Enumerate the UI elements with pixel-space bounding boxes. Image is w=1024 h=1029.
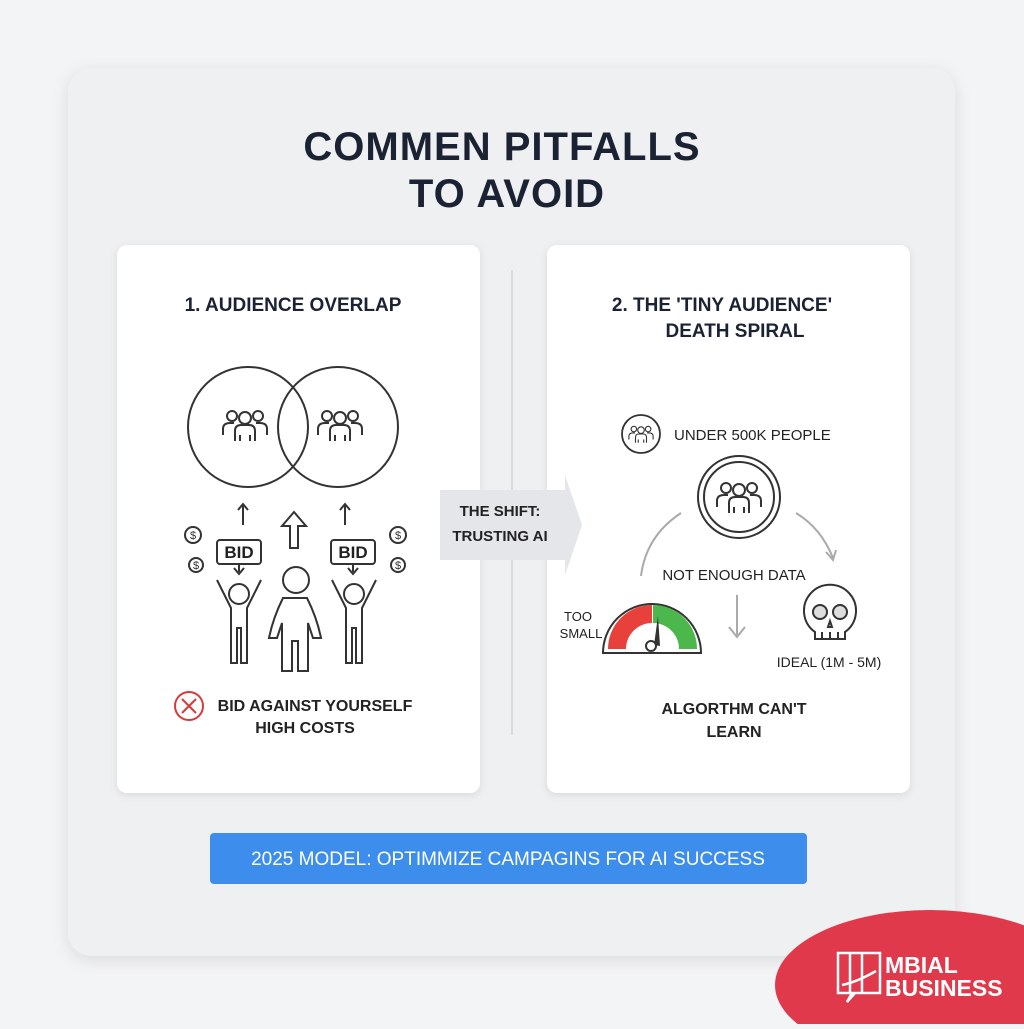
- title: [303, 125, 701, 216]
- text: algorithm can't learn: LEARN: [706, 724, 762, 741]
- venn diagram: [188, 367, 398, 487]
- text: algorithm can't learn: ALGORTHM CAN'T: [661, 701, 807, 718]
- logo: mbial business: [775, 910, 1024, 1029]
- panel: tiny audience death spiral: UNDER 500K PEOPLE: [674, 427, 831, 444]
- title: TO AVOID: [409, 172, 605, 216]
- heading: audience overlap: 1. AUDIENCE OVERLAP: [185, 295, 402, 316]
- panel: tiny audience death spiral: TOO: [564, 609, 592, 624]
- banner: 2025 model: 2025 MODEL: OPTIMMIZE CAMPAGINS FOR AI SUCCESS: [251, 849, 765, 870]
- arrow: the shift: TRUSTING AI: [452, 528, 548, 545]
- panel: audience overlap: [117, 245, 480, 793]
- icon: central group: [698, 456, 780, 538]
- arrow: the shift: [440, 475, 582, 575]
- icon: red x: [175, 692, 203, 720]
- heading: death spiral: 2. THE 'TINY AUDIENCE': [612, 295, 832, 316]
- panel: audience overlap: BID: [224, 543, 254, 562]
- panel: audience overlap: BID: [338, 543, 368, 562]
- panel: audience overlap: $: [190, 530, 196, 542]
- panel: tiny audience death spiral: SMALL: [560, 626, 602, 641]
- text: bid against yourself: HIGH COSTS: [255, 720, 355, 737]
- title: COMMEN PITFALLS: [303, 125, 701, 169]
- logo: mbial business: BUSINESS: [885, 975, 1003, 1001]
- heading: death spiral: [612, 295, 832, 342]
- text: algorithm can't learn: [661, 701, 807, 741]
- panel: audience overlap: $: [395, 560, 401, 572]
- icon: skull: [804, 585, 856, 639]
- panel: audience overlap: $: [193, 560, 199, 572]
- logo: mbial business: MBIAL: [885, 952, 958, 978]
- panel: audience overlap: $: [395, 530, 401, 542]
- spiral arrows: [641, 513, 836, 637]
- panel: tiny audience death spiral: IDEAL (1M - 5M): [777, 654, 881, 670]
- arrow: the shift: THE SHIFT:: [460, 503, 540, 520]
- banner: 2025 model: [210, 833, 807, 884]
- icon: small group: [622, 415, 660, 453]
- panel: outer card: [68, 68, 955, 956]
- gauge: [603, 604, 701, 653]
- bidders illustration: [185, 504, 406, 671]
- text: bid against yourself: [218, 698, 413, 737]
- panel: tiny audience death spiral: [547, 245, 910, 793]
- text: bid against yourself: BID AGAINST YOURSELF: [218, 698, 413, 715]
- heading: death spiral: DEATH SPIRAL: [666, 321, 805, 342]
- panel: tiny audience death spiral: NOT ENOUGH DATA: [662, 567, 806, 584]
